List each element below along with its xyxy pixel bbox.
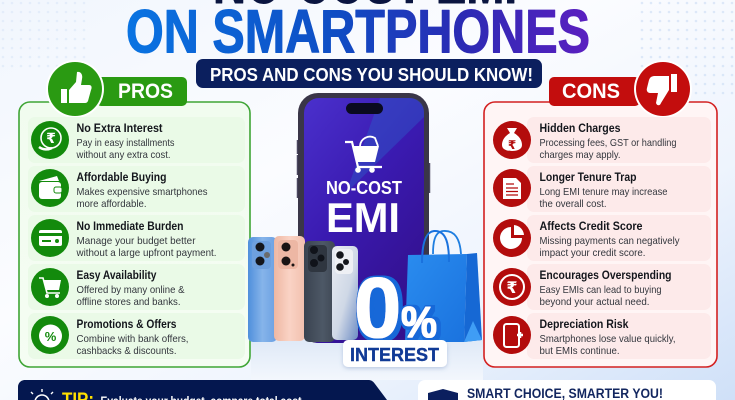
pink phone [274,236,305,341]
pros row: affordable buying: Makes expensive smartphones [76,187,208,198]
cons row: hidden charges: ₹ [508,138,516,152]
zero percent interest [343,261,447,367]
smart choice card [418,380,716,400]
graphite phone [304,241,335,342]
cons row: encourages overspending: beyond your actual need. [540,297,650,308]
cons row: hidden charges: Hidden Charges [540,123,620,135]
pros heading badge [46,60,187,118]
icon: light bulb [31,389,53,400]
pros row: affordable buying: more affordable. [76,199,146,210]
subtitle banner [196,59,542,88]
cons row: depreciation risk [493,313,711,359]
pros row: no extra interest [28,117,245,163]
cons row: hidden charges [493,117,711,163]
panel: cons [484,60,717,367]
silver phone [332,246,358,340]
pros row: promotions and offers: % [45,329,57,344]
cons row: encourages overspending: ₹ [506,280,518,297]
pros row: no extra interest: without any extra cost. [76,150,170,161]
cons row: longer tenure trap [493,166,711,212]
pros row: affordable buying [28,166,245,212]
cons row: longer tenure trap: Longer Tenure Trap [540,172,636,184]
cons row: hidden charges: charges may apply. [540,150,620,161]
cons heading badge [549,60,692,118]
icon: shopping cart [345,137,382,173]
pros row: no immediate burden [28,215,245,261]
pros row: promotions and offers: cashbacks & discounts. [76,346,176,357]
cons row: depreciation risk: Depreciation Risk [540,319,629,331]
pros row: affordable buying: Affordable Buying [76,172,166,184]
phone screen text: EMI [326,194,400,241]
interest label: INTEREST [350,345,439,365]
zero percent figure [354,261,437,356]
blue phone [248,237,277,342]
cons row: encourages overspending: Easy EMIs can lead to buying [540,285,662,296]
pros row: promotions and offers: Promotions & Offers [76,319,176,331]
pros row: no immediate burden: Manage your budget better [76,236,196,247]
pros row: easy availability: Offered by many online & [76,285,185,296]
pros row: no immediate burden: without a large upfront payment. [76,248,216,259]
cons row: depreciation risk: but EMIs continue. [540,346,620,357]
cons row: hidden charges: Processing fees, GST or handling [540,138,677,149]
zero percent figure: 0 [354,261,401,356]
cons row: encourages overspending [493,264,711,310]
main phone [298,93,430,343]
pros row: no extra interest: Pay in easy installments [76,138,174,149]
zero percent figure: % [401,298,437,347]
phone screen text: NO-COST [326,178,402,198]
panel: pros [19,60,250,367]
cons row: longer tenure trap: Long EMI tenure may increase [540,187,668,198]
pros row: easy availability: offline stores and banks. [76,297,180,308]
cons row: affects credit score: Missing payments can negatively [540,236,680,247]
pros row: promotions and offers [28,313,245,359]
pros row: no immediate burden: No Immediate Burden [76,221,184,233]
pros row: no extra interest: ₹ [46,130,56,146]
icon: shield [428,389,458,400]
pros heading badge: PROS [118,80,173,103]
cons row: longer tenure trap: the overall cost. [540,199,606,210]
shopping bag [405,231,482,342]
cons row: affects credit score: Affects Credit Score [540,221,642,233]
pros row: easy availability [28,264,245,310]
pros row: easy availability: Easy Availability [76,270,157,282]
cons row: depreciation risk: Smartphones lose value quickly, [540,334,676,345]
phones row [248,236,358,342]
cons row: affects credit score [493,215,711,261]
pros row: no extra interest: No Extra Interest [76,123,163,135]
cons row: encourages overspending: Encourages Overspending [540,270,672,282]
tip banner [18,380,387,400]
subtitle banner: PROS AND CONS YOU SHOULD KNOW! [210,64,533,85]
cons heading badge: CONS [562,80,620,103]
pros row: promotions and offers: Combine with bank offers, [76,334,188,345]
cons row: affects credit score: impact your credit score. [540,248,646,259]
